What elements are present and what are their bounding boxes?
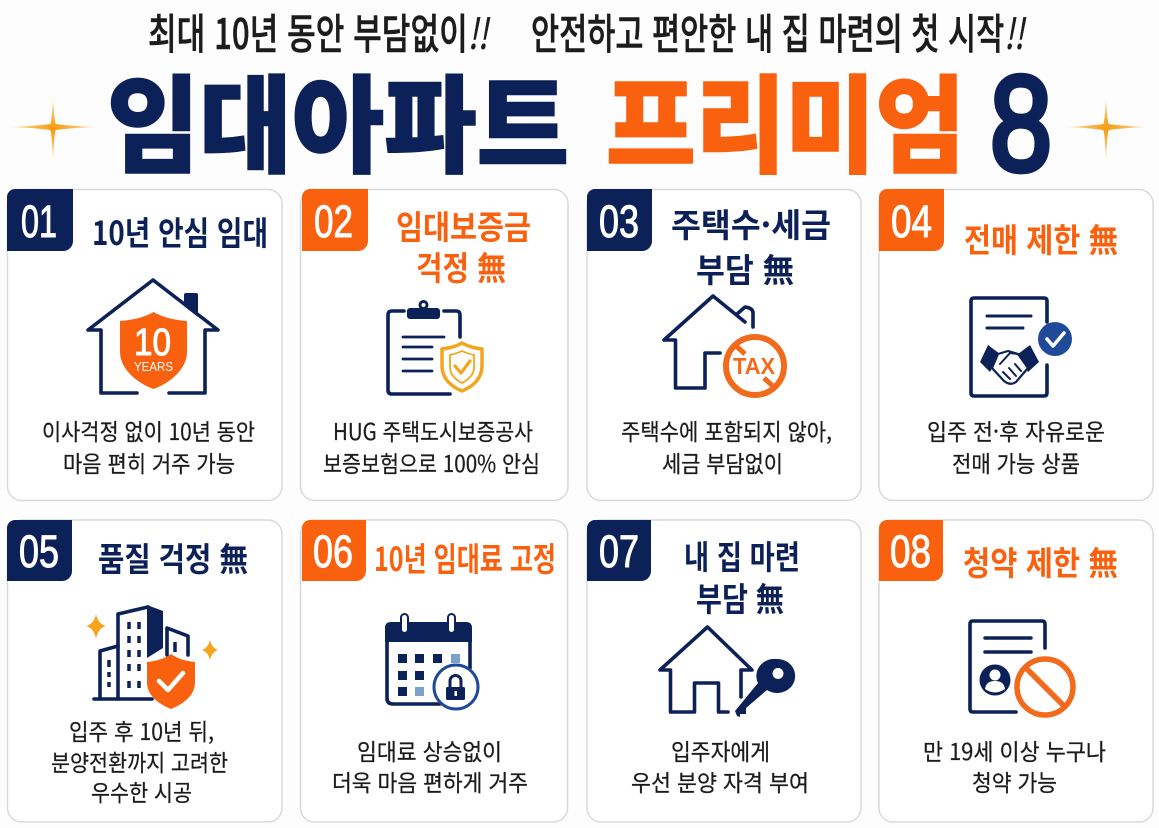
description 05: 분양전환까지 고려한 [51,744,228,778]
heading 07: 부담 無 [696,573,784,621]
panel: 02 임대보증금 걱정 無 [300,189,568,500]
icon: document with prohibition [970,621,1073,715]
description 04 [927,413,1105,479]
description 02: 보증보험으로 100% 안심 [323,445,540,479]
icon: right sparkle [1067,98,1147,160]
icon: house with 10 years shield: YEARS [134,360,173,374]
heading 03: 주택수·세금 [671,199,831,247]
description 06 [332,733,528,798]
description 04: 입주 전·후 자유로운 [927,413,1105,447]
title: 프리미엄 [606,41,965,195]
badge 07: 07 [599,526,639,577]
badge 08: 08 [890,526,931,577]
description 07: 입주자에게 [671,733,770,767]
panel: 08 청약 제한 無 [879,520,1153,822]
title [107,41,1052,199]
badge 06: 06 [313,526,353,577]
badge 04: 04 [891,196,932,247]
panel: 01 10년 안심 임대 [7,189,282,500]
description 08: 만 19세 이상 누구나 [923,733,1106,767]
description 03: 주택수에 포함되지 않아, [621,413,832,447]
title: 8 [990,48,1052,199]
description 07 [631,733,809,798]
icon: clipboard with shield [388,302,482,394]
icon: house with no tax: TAX [733,353,776,379]
icon: left sparkle [10,98,97,160]
description 03: 세금 부담없이 [662,445,783,479]
heading 04: 전매 제한 無 [964,214,1118,262]
badge 04 [879,189,944,251]
description 08: 청약 가능 [972,764,1057,798]
badge 01: 01 [21,196,57,247]
description 01 [42,413,255,479]
badge 05: 05 [19,526,59,577]
description 01: 마음 편히 거주 가능 [63,445,235,479]
description 02: HUG 주택도시보증공사 [333,413,533,447]
badge 03: 03 [599,196,639,247]
panel: 07 내 집 마련 부담 無 [587,520,861,822]
heading 07 [684,531,800,621]
description 06: 임대료 상승없이 [357,733,502,767]
heading 03 [671,199,831,292]
description 08 [923,733,1106,798]
description 02 [323,413,540,479]
description 07: 우선 분양 자격 부여 [631,764,809,798]
heading 02 [396,201,531,290]
icon: calendar with lock [385,614,478,709]
icon: house with 10 years shield [88,280,218,393]
icon: contract with handshake [971,298,1072,396]
badge 05 [7,520,72,581]
panel: 04 전매 제한 無 [879,189,1153,500]
heading 02: 걱정 無 [416,242,506,290]
description 06: 더욱 마음 편하게 거주 [332,764,528,798]
heading 01: 10년 안심 임대 [92,207,268,255]
panel: 06 10년 임대료 고정 [300,520,568,822]
description 04: 전매 가능 상품 [952,445,1080,479]
badge 07 [587,520,651,581]
heading 07: 내 집 마련 [684,531,800,579]
description 05 [51,713,228,808]
description 03 [621,413,832,479]
heading 08: 청약 제한 無 [963,537,1118,585]
badge 06 [302,520,366,581]
title: 임대아파트 [107,41,569,195]
badge 02: 02 [314,196,353,247]
heading 02: 임대보증금 [396,201,531,249]
icon: buildings with shield [86,605,218,709]
subtitle [148,1,1026,62]
panel: 05 품질 걱정 無 [7,520,282,822]
panel: 03 주택수·세금 부담 無 [587,189,861,500]
badge 08 [879,520,943,581]
heading 06: 10년 임대료 고정 [374,533,556,581]
badge 02 [302,189,368,251]
icon: house with key [660,627,795,717]
badge 01 [7,189,73,251]
badge 03 [587,189,652,251]
heading 03: 부담 無 [696,244,794,292]
icon: house with 10 years shield: 10 [134,322,171,364]
description 05: 우수한 시공 [91,774,192,808]
description 01: 이사걱정 없이 10년 동안 [42,413,255,447]
icon: house with no tax [664,296,784,395]
heading 05: 품질 걱정 無 [98,533,248,581]
description 05: 입주 후 10년 뒤, [69,713,214,747]
subtitle: 최대 10년 동안 부담없이!! [148,1,491,62]
